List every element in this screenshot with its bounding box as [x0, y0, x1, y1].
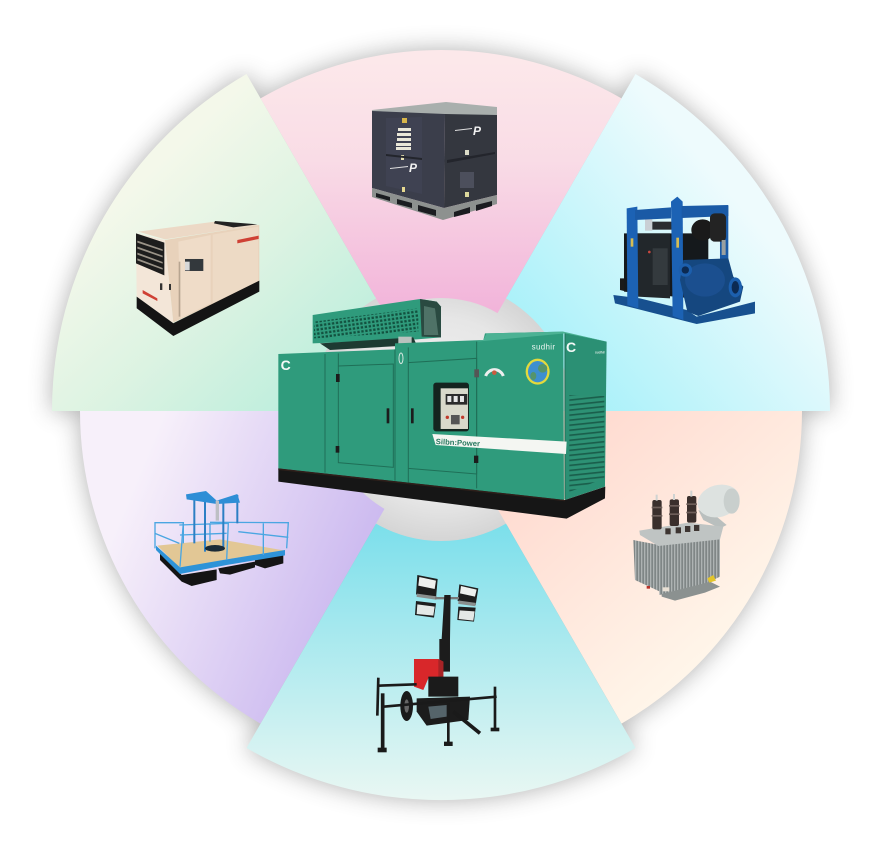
radiator canopy	[313, 299, 441, 350]
frame posts	[627, 207, 638, 308]
product: pink segment enclosed unit: P	[409, 161, 418, 175]
red generator housing	[414, 659, 443, 690]
side label: sudhir	[595, 350, 605, 355]
Cummins logos	[281, 339, 576, 373]
deck	[157, 539, 285, 568]
wedge: green compressor segment	[52, 74, 376, 411]
front and side panels	[278, 332, 564, 500]
wedge: cyan pump segment	[506, 74, 830, 411]
small symbol above divider	[399, 353, 403, 364]
white brand stripe: Silbn:Power	[436, 437, 480, 448]
gauge badge	[486, 370, 503, 376]
trailer frame	[428, 677, 458, 697]
skid base	[613, 295, 755, 324]
product: pink segment enclosed unit: P	[473, 124, 482, 138]
wedge: purple platform segment	[80, 411, 384, 724]
engine block	[620, 278, 627, 292]
black base skid	[278, 468, 605, 519]
brand logo text: sudhir	[532, 342, 555, 351]
product: purple segment work platform	[155, 491, 288, 586]
wedge: orange transformer segment	[498, 411, 802, 724]
side louver	[569, 395, 604, 492]
product: green segment air compressor	[136, 221, 259, 336]
lamp heads	[415, 575, 478, 622]
air filter	[691, 219, 714, 241]
soft shadow behind wheel	[52, 50, 830, 800]
pump housing	[680, 258, 743, 316]
door seams	[325, 333, 565, 499]
floats	[160, 553, 217, 586]
Cummins logos: C	[566, 339, 576, 355]
generator enclosure main unit	[278, 299, 607, 519]
wedge: teal light tower segment	[246, 524, 636, 800]
globe emblem	[526, 359, 550, 385]
product: teal segment light tower	[377, 575, 499, 752]
product: pink segment enclosed unit	[372, 102, 497, 220]
central hub disc	[309, 279, 573, 543]
product: cyan segment diesel pump	[613, 197, 755, 324]
product: orange segment oil transformer	[633, 480, 743, 601]
white brand stripe	[432, 434, 567, 454]
control panel	[433, 383, 469, 431]
railings	[155, 522, 288, 567]
Cummins logos: C	[281, 357, 291, 373]
wedge: pink compressor segment	[260, 50, 622, 313]
gantry	[194, 492, 237, 552]
mast	[439, 595, 451, 672]
